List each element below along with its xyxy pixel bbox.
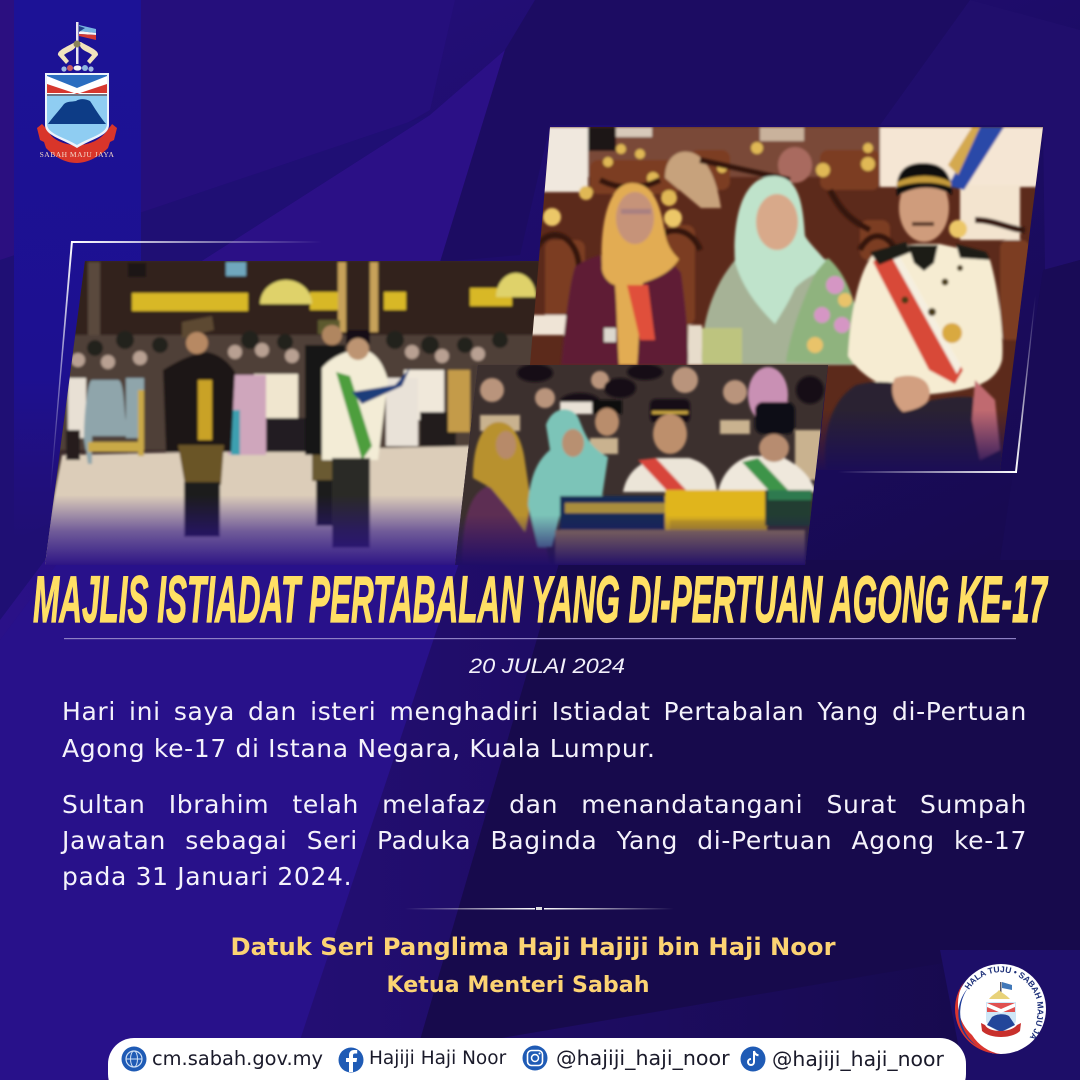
divider under title — [64, 638, 1016, 639]
logo: Sabah coat of arms: SABAH MAJU JAYA — [40, 150, 114, 159]
footer pill — [108, 1038, 966, 1080]
body paragraph 2: Sultan Ibrahim telah melafaz dan menandatangani Surat Sumpah — [62, 790, 1027, 819]
flag — [76, 22, 96, 64]
body paragraph 2: pada 31 Januari 2024. — [62, 862, 352, 891]
date: 20 JULAI 2024 — [468, 655, 625, 678]
photo: seated dignitaries — [450, 360, 840, 570]
icon: tiktok — [740, 1046, 766, 1072]
logo: Sabah coat of arms — [37, 22, 117, 163]
signature divider — [405, 907, 674, 910]
body paragraph 2 — [60, 790, 1027, 891]
body paragraph 2: Jawatan sebagai Seri Paduka Baginda Yang di-Pertuan Agong ke-17 — [62, 826, 1027, 855]
footer contact labels: cm.sabah.gov.my — [152, 1047, 323, 1070]
footer contact labels: @hajiji_haji_noor — [772, 1047, 944, 1071]
icon: facebook — [338, 1048, 364, 1072]
signatory role: Ketua Menteri Sabah — [386, 973, 650, 998]
body paragraph 1: Agong ke-17 di Istana Negara, Kuala Lumpur. — [62, 734, 656, 763]
body paragraph 1: Hari ini saya dan isteri menghadiri Istiadat Pertabalan Yang di-Pertuan — [62, 697, 1027, 726]
footer contact labels: @hajiji_haji_noor — [556, 1046, 730, 1070]
footer contact labels: Hajiji Haji Noor — [369, 1048, 506, 1069]
frame corner: top left — [50, 241, 322, 490]
body paragraph 1 — [62, 697, 1027, 763]
footer contact labels — [152, 1046, 944, 1071]
icon: instagram — [522, 1046, 548, 1070]
photo: Chief Minister and spouses seated — [520, 125, 1050, 475]
frame corner: bottom right — [838, 295, 1036, 473]
photo: ceremony hall oath reading — [40, 261, 542, 571]
signatory name: Datuk Seri Panglima Haji Hajiji bin Haji Noor — [230, 933, 836, 961]
icon: website globe — [122, 1046, 146, 1072]
badge: Hala Tuju Sabah Maju Jaya: HALA TUJU • SABAH MAJU JAYA — [964, 966, 1044, 1039]
